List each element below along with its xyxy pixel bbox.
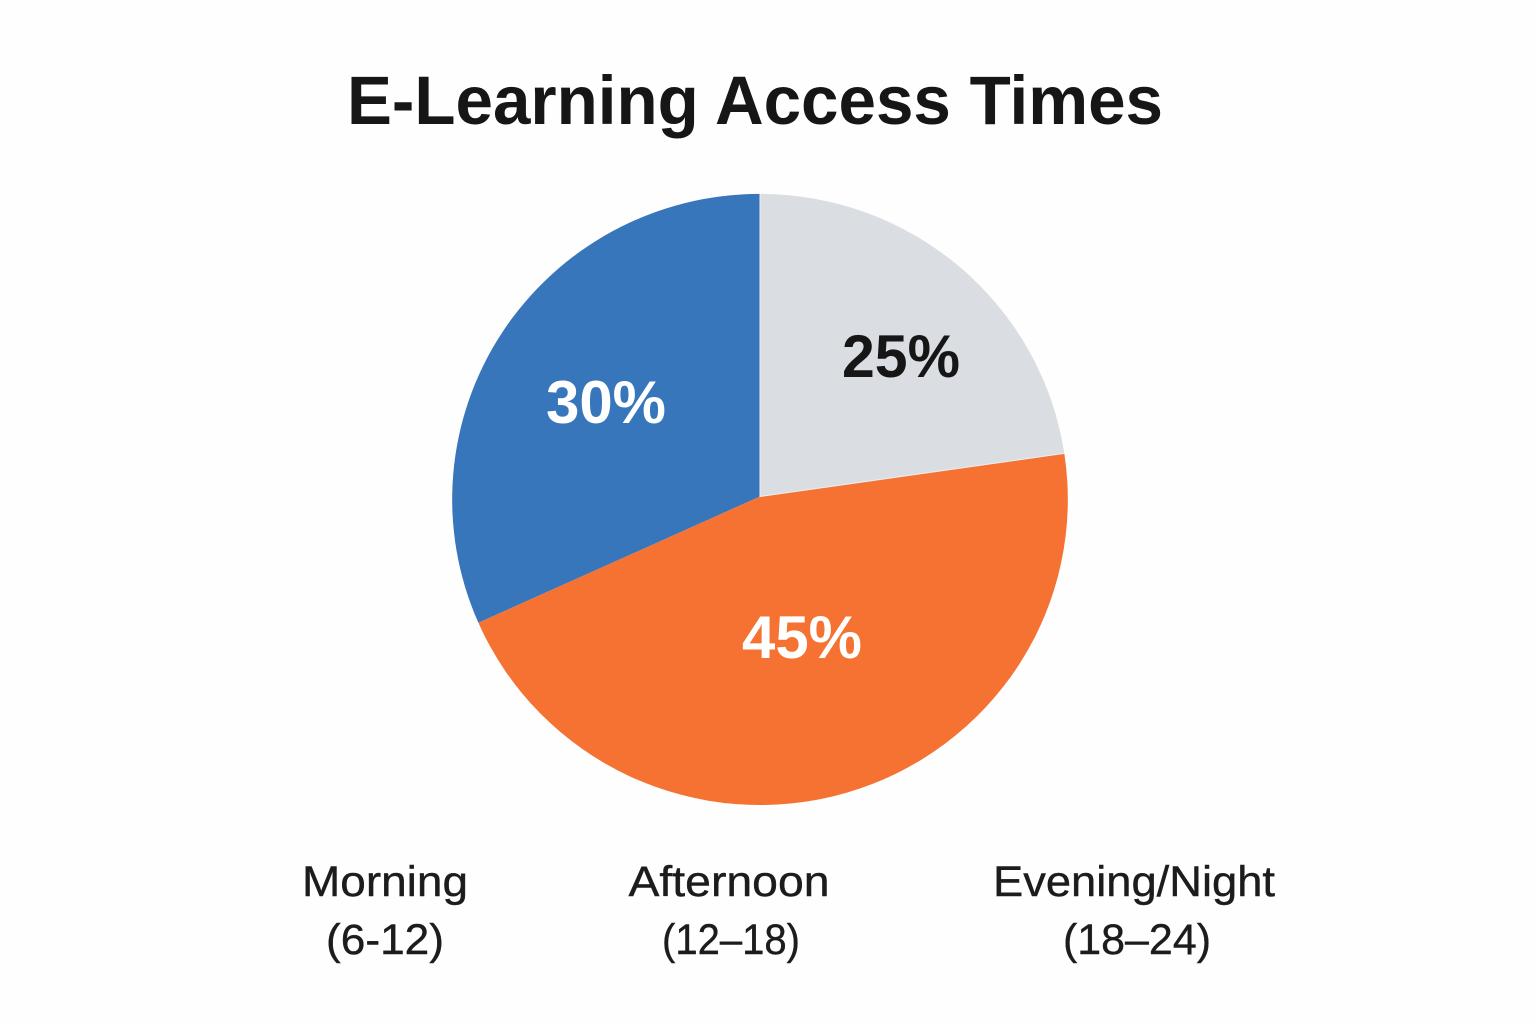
legend: evening/night: (18–24) [1063, 916, 1211, 964]
label: 25%: 25% [842, 323, 960, 390]
label: 30%: 30% [546, 369, 666, 436]
label: 45%: 45% [742, 604, 862, 671]
legend: afternoon: Afternoon [628, 858, 830, 906]
legend: morning: (6-12) [326, 916, 444, 964]
legend: morning: Morning [302, 858, 468, 906]
legend: afternoon: (12–18) [662, 916, 800, 964]
legend: evening/night: Evening/Night [993, 858, 1275, 906]
slice: evening/night 25% [760, 194, 1064, 496]
legend: afternoon [628, 858, 830, 964]
slice: morning 30% [452, 194, 760, 623]
slice separators [760, 194, 1064, 496]
legend: evening/night [993, 858, 1275, 964]
legend: morning [302, 858, 468, 964]
pie chart [452, 194, 1068, 805]
title: E-Learning Access Times [347, 62, 1163, 139]
slice: afternoon 45% [478, 453, 1068, 805]
